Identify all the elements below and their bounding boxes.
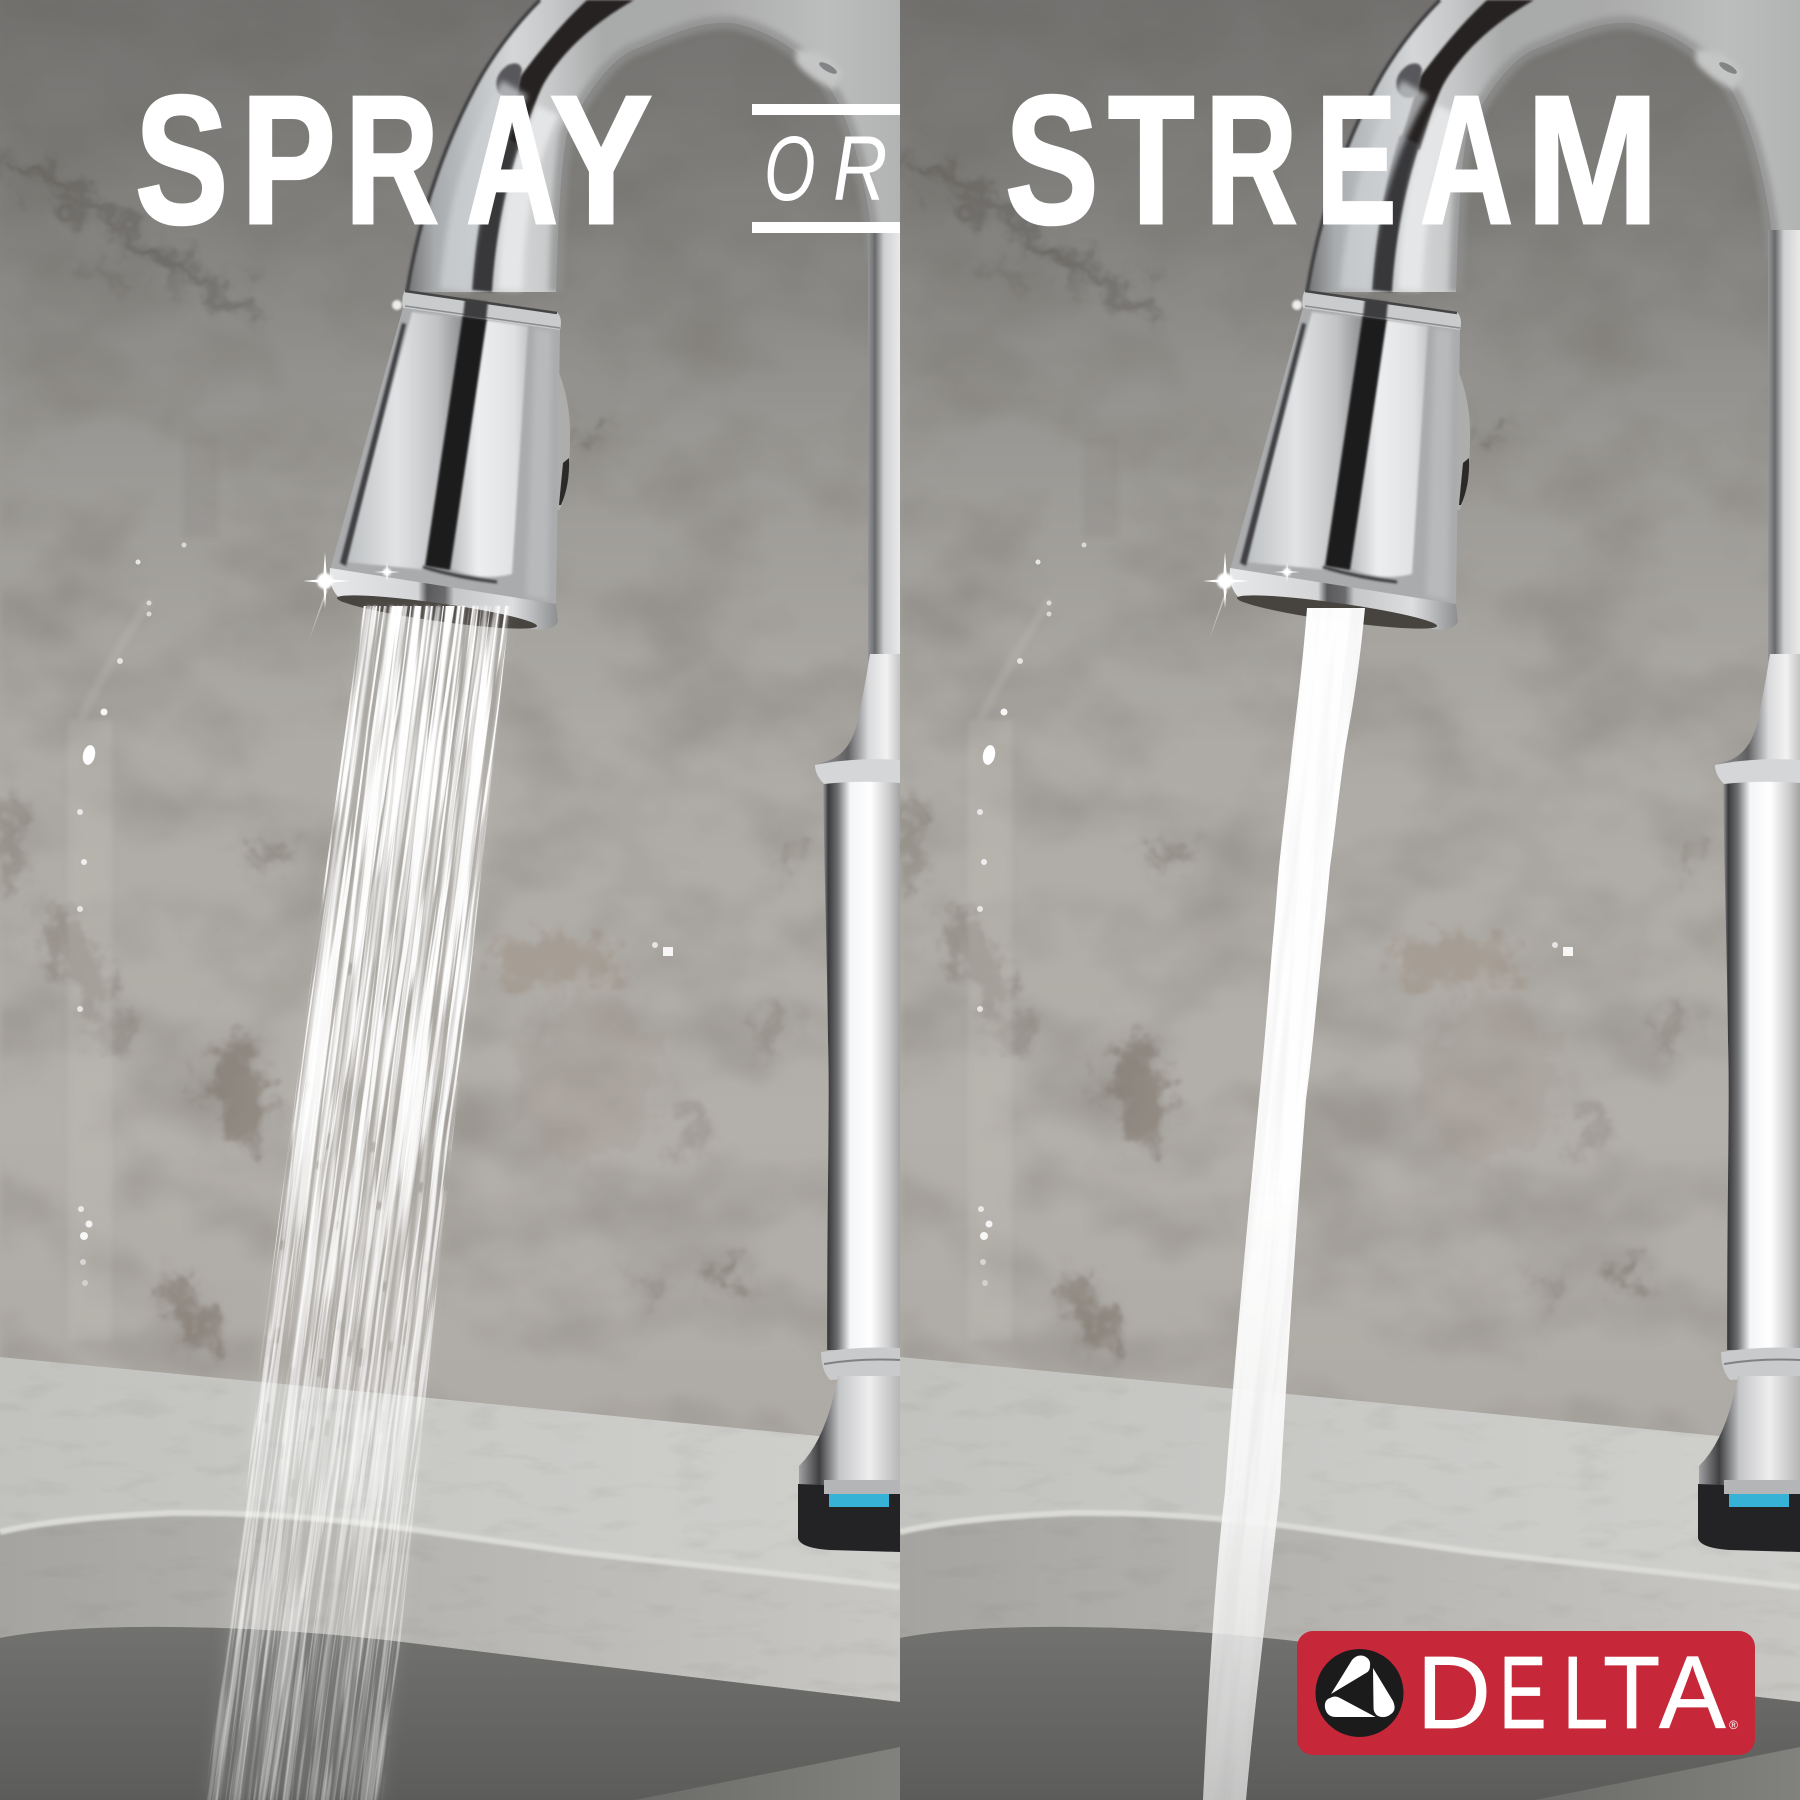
heading: SPRAY: A xyxy=(466,57,558,262)
heading: SPRAY xyxy=(135,57,652,262)
neck gray patch xyxy=(496,63,522,98)
nozzle face xyxy=(336,589,538,635)
logo: Delta red badge xyxy=(1297,1631,1755,1755)
spray head button xyxy=(557,368,570,510)
marble noise texture xyxy=(0,0,900,1500)
countertop surface xyxy=(0,1357,900,1590)
icon: Delta tri-drop emblem xyxy=(1316,1649,1404,1737)
arch translucent inner ring xyxy=(556,23,874,292)
faucet base flare xyxy=(815,654,900,770)
heading: SPRAY: R xyxy=(345,57,439,262)
marble veining xyxy=(0,160,802,1361)
logo wordmark: DELTA: T xyxy=(1603,1635,1660,1750)
base lower flare xyxy=(799,1376,900,1486)
arch dark reflection lower xyxy=(472,135,520,292)
faucet body xyxy=(823,780,900,1350)
label: OR xyxy=(764,118,887,220)
sparkles xyxy=(303,300,402,640)
sink basin xyxy=(0,1627,900,1800)
LED indicator xyxy=(829,1494,889,1507)
divider rule bottom xyxy=(752,222,900,233)
countertop bright edge xyxy=(0,1513,900,1587)
spray head collar xyxy=(402,290,561,330)
marble wall xyxy=(0,0,900,1500)
countertop veining xyxy=(0,1357,900,1702)
panel: spray photo background xyxy=(0,0,900,1800)
faint reflection on wall xyxy=(68,437,218,1340)
water: spray pattern xyxy=(0,540,592,1800)
arch dark reflection upper xyxy=(500,0,634,150)
logo wordmark: DELTA: E xyxy=(1499,1635,1547,1750)
label: OR: R xyxy=(833,118,887,220)
heading: STREAM: E xyxy=(1316,57,1396,262)
panel: stream photo background xyxy=(896,0,1800,1800)
logo wordmark: DELTA: A xyxy=(1659,1635,1726,1750)
faucet spout arch xyxy=(407,0,900,660)
heading: SPRAY: Y xyxy=(550,57,652,262)
arch hot spot xyxy=(796,49,842,90)
upper body collar xyxy=(815,759,900,784)
countertop front face xyxy=(0,1513,900,1702)
lower body collar xyxy=(821,1348,900,1382)
logo wordmark: DELTA: D xyxy=(1417,1635,1491,1750)
label: OR: O xyxy=(764,118,816,220)
base black puck xyxy=(798,1484,900,1552)
registered mark: ® xyxy=(1729,1718,1738,1732)
nozzle ring xyxy=(330,568,558,630)
heading: STREAM xyxy=(1005,57,1659,262)
spray head cone xyxy=(330,308,560,604)
reflected droplets xyxy=(77,542,673,1286)
heading: SPRAY: S xyxy=(135,57,228,262)
sink far wall wedge xyxy=(635,1747,900,1800)
heading: SPRAY: P xyxy=(241,57,336,262)
divider rule top xyxy=(752,104,900,115)
base chrome plate xyxy=(824,1480,900,1494)
heading: STREAM: M xyxy=(1526,57,1659,262)
heading: STREAM: S xyxy=(1005,57,1099,262)
logo wordmark: DELTA: L xyxy=(1562,1635,1608,1750)
water: solid stream xyxy=(1022,561,1452,1800)
heading: STREAM: R xyxy=(1205,57,1298,262)
logo wordmark: DELTA xyxy=(1417,1635,1726,1750)
heading: STREAM: A xyxy=(1420,57,1513,262)
heading: STREAM: T xyxy=(1108,57,1195,262)
